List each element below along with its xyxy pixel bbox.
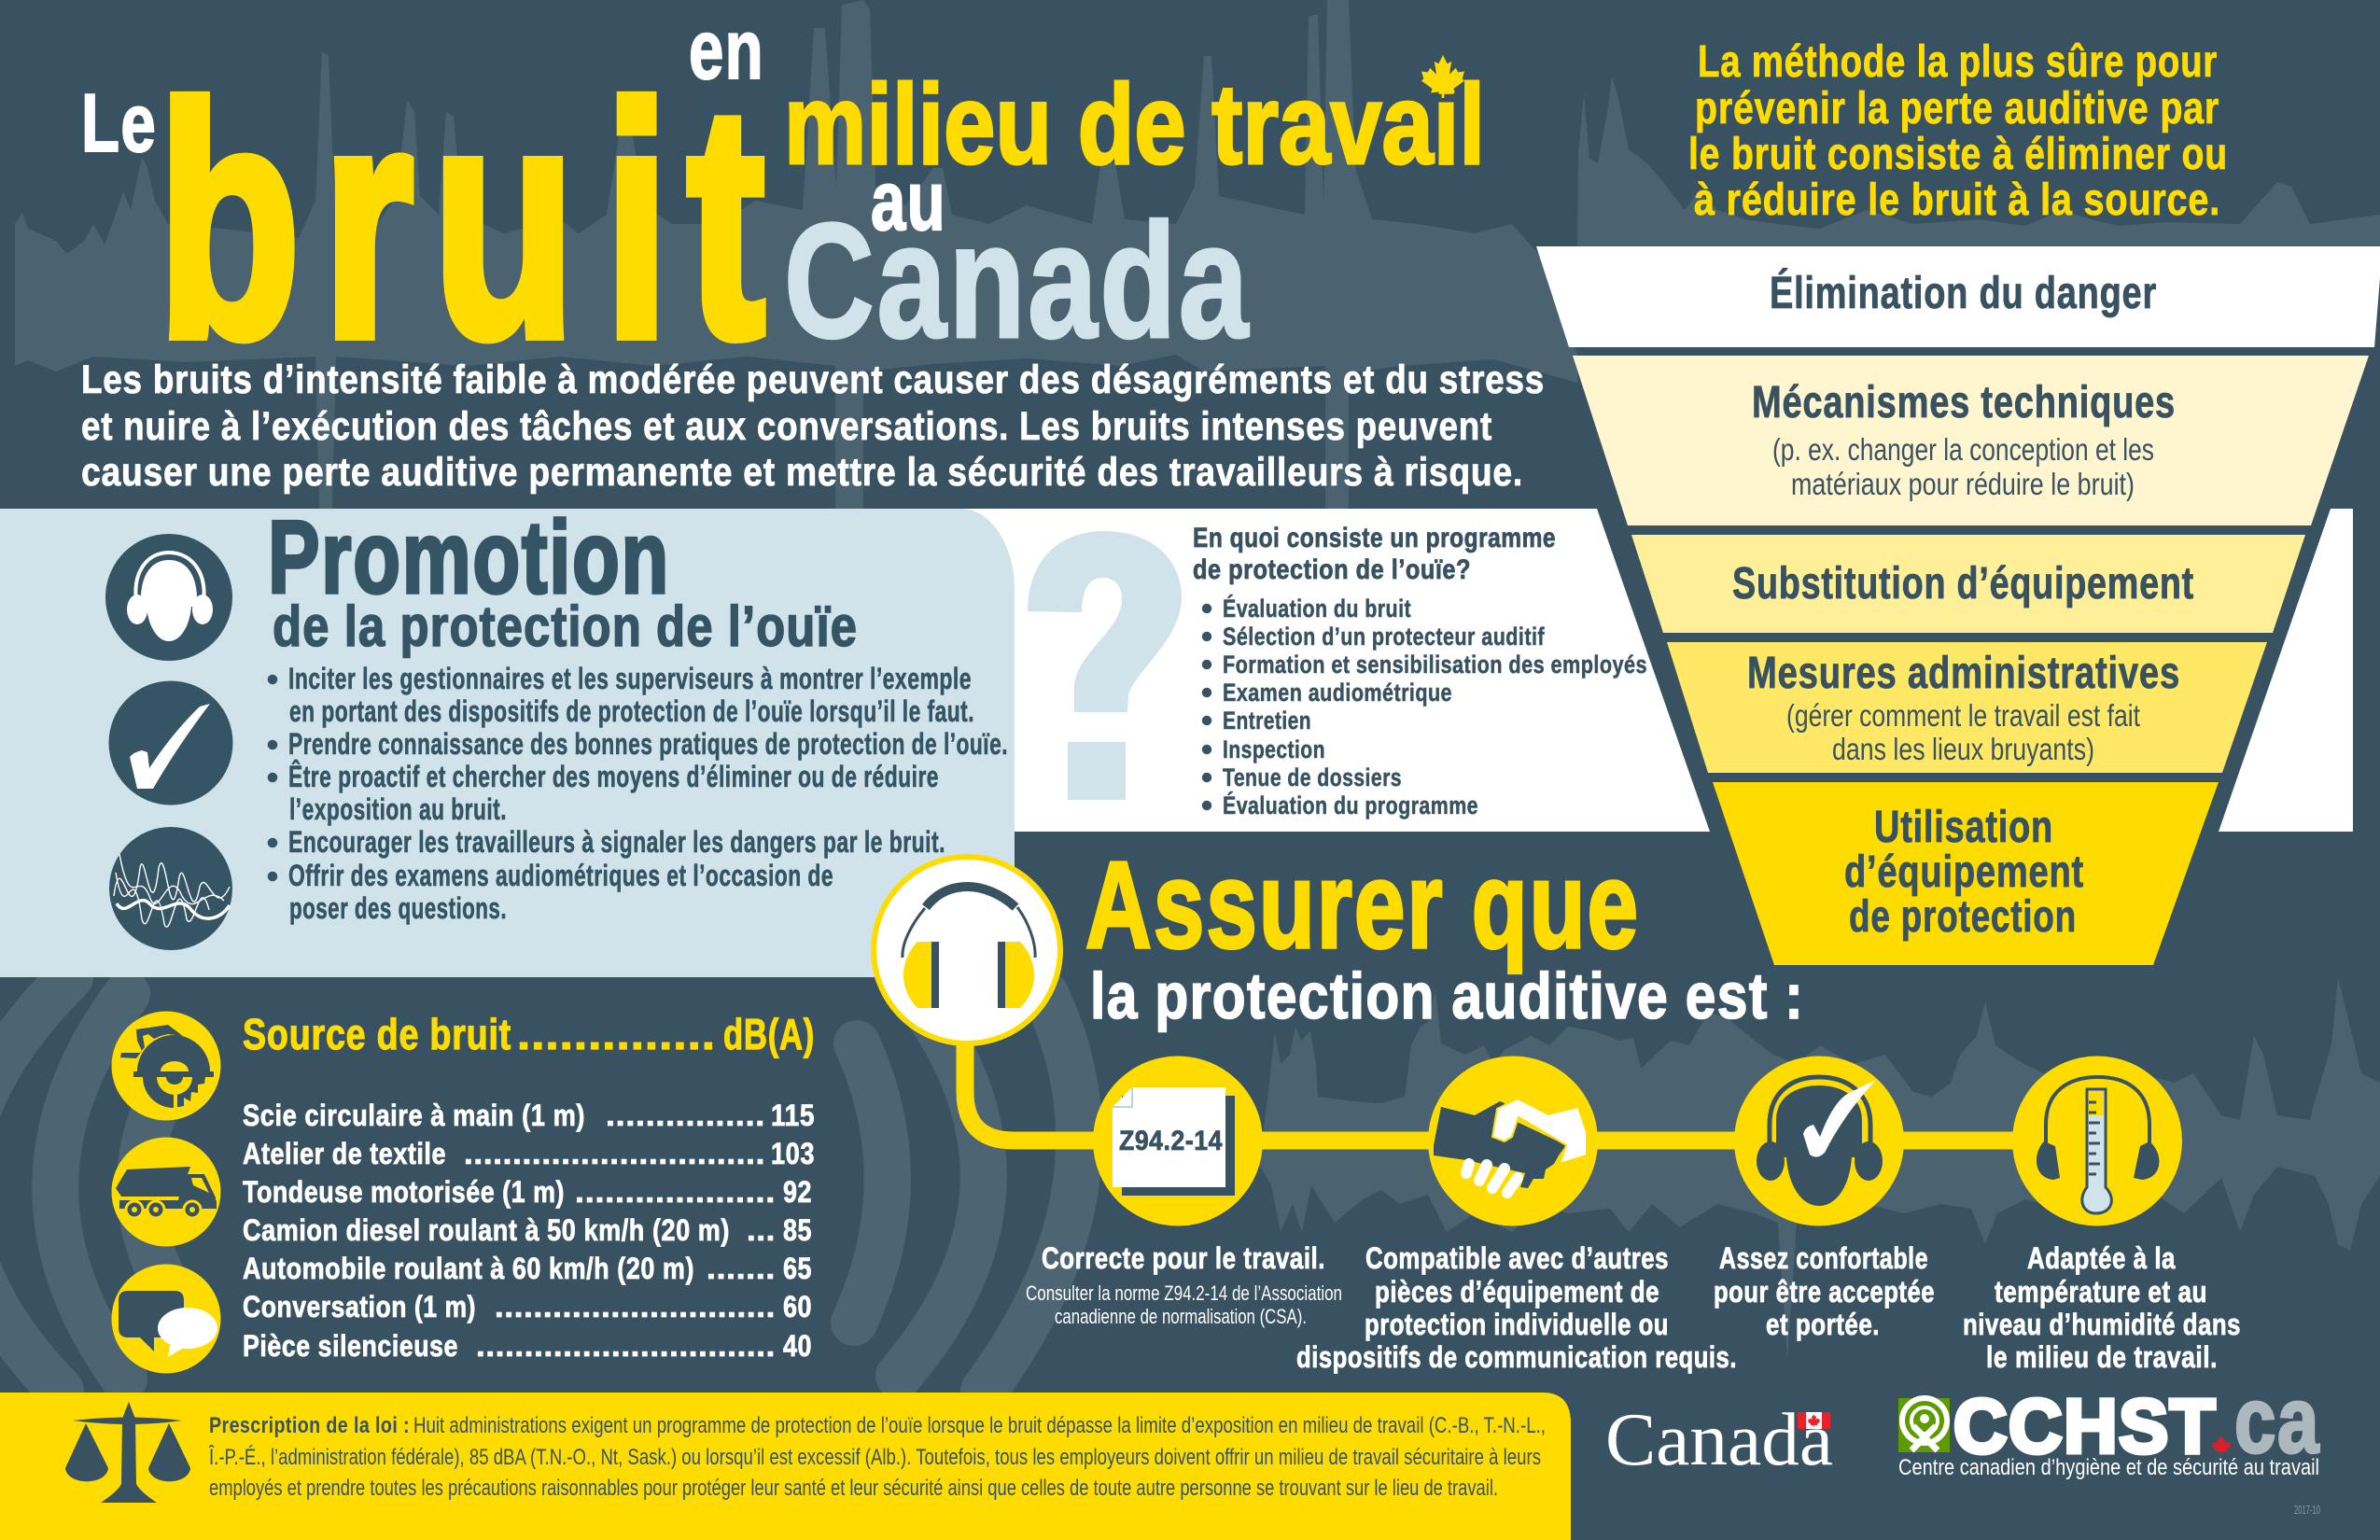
list: programme elements: Inspection — [1223, 735, 1325, 763]
table rows: 115 — [771, 1099, 815, 1132]
funnel level: substitution — [1631, 535, 2305, 633]
text block: promotion bullets — [268, 662, 1008, 925]
table rows: ............................... — [464, 1137, 765, 1170]
table rows: Automobile roulant à 60 km/h (20 m) — [243, 1252, 694, 1285]
title word: au: au — [871, 155, 946, 248]
icon: dump truck — [112, 1137, 220, 1247]
item: comfortable: pour être acceptée — [1714, 1275, 1935, 1309]
table rows: Tondeuse motorisée (1 m) — [243, 1175, 565, 1209]
background noise waveform: bottom right — [1251, 977, 2380, 1358]
table rows: ... — [747, 1213, 776, 1247]
text block: law prescription: employés et prendre toutes les précautions raisonnables pour protéger leur santé et leur sécurité ainsi que celles de toute autre personne se trouvant sur le lieu de travail. — [209, 1476, 1498, 1501]
text block: promotion bullets: en portant des dispositifs de protection de l’ouïe lorsqu’il le faut. — [289, 694, 974, 728]
callout: safest method: La méthode la plus sûre pour — [1698, 37, 2218, 87]
funnel level: elimination — [1536, 246, 2380, 347]
item: suited to temperature and humidity: Adaptée à la — [2027, 1241, 2176, 1275]
callout: safest method — [1688, 37, 2228, 225]
table header: Source de bruit — [243, 1010, 511, 1058]
list: programme elements: Entretien — [1223, 707, 1311, 735]
funnel level: administrative: Mesures administratives — [1747, 649, 2180, 698]
background sound-wave arcs — [0, 971, 1079, 1391]
item: correct for the job — [1026, 1057, 1342, 1328]
funnel level: PPE — [1713, 782, 2219, 965]
table rows: Atelier de textile — [243, 1137, 446, 1170]
table rows: 92 — [783, 1175, 812, 1209]
text block: promotion bullets: poser des questions. — [289, 891, 507, 925]
icon: speech bubbles — [112, 1264, 220, 1374]
connector line — [965, 1036, 2100, 1141]
white background panel left of funnel — [933, 509, 1710, 832]
intro paragraph: et nuire à l’exécution des tâches et aux conversations. Les bruits intenses peuvent — [81, 404, 1492, 449]
item: correct for the job: Correcte pour le travail. — [1042, 1241, 1325, 1275]
table rows — [243, 1099, 815, 1363]
table rows: ............................... — [476, 1329, 776, 1363]
background noise waveform: top — [15, 0, 2380, 509]
item: suited to temperature and humidity — [1963, 1057, 2241, 1374]
table rows: 103 — [771, 1137, 815, 1170]
heading: programme: En quoi consiste un programme — [1193, 523, 1556, 553]
logo: Canada wordmark: Canada — [1605, 1399, 1833, 1481]
table rows: ....... — [707, 1252, 776, 1285]
list: programme elements: Évaluation du programme — [1223, 791, 1478, 819]
funnel level: administrative: dans les lieux bruyants) — [1832, 732, 2094, 766]
table rows: 65 — [783, 1252, 812, 1285]
text block: promotion bullets: Inciter les gestionnaires et les superviseurs à montrer l’exemple — [288, 662, 972, 695]
icon: scales of justice — [65, 1402, 190, 1503]
heading: de la protection de l'ouïe: de la protection de l’ouïe — [273, 595, 858, 658]
list: programme elements: Tenue de dossiers — [1223, 763, 1402, 791]
title word: en: en — [689, 4, 764, 97]
wordmark: CCHST: CCHST — [1953, 1384, 2217, 1469]
title words: milieu de travail: milieu de travail — [784, 61, 1485, 188]
table rows: .................... — [575, 1175, 776, 1209]
intro paragraph — [81, 357, 1545, 495]
table header: .............. — [517, 1010, 716, 1058]
heading: programme — [1193, 523, 1556, 585]
icon: maple leaf on title — [1421, 55, 1464, 98]
item: correct for the job: Consulter la norme Z94.2-14 de l’Association — [1026, 1281, 1342, 1305]
panel: legislation — [0, 1393, 1571, 1540]
item: suited to temperature and humidity: le milieu de travail. — [1986, 1340, 2218, 1374]
funnel level: engineering: Mécanismes techniques — [1752, 378, 2176, 427]
table rows: Conversation (1 m) — [243, 1290, 476, 1323]
icon: CCHST emblem — [1898, 1398, 1950, 1452]
title word: bruit: bruit — [158, 38, 769, 405]
intro paragraph: causer une perte auditive permanente et mettre la sécurité des travailleurs à risque. — [81, 450, 1523, 495]
list: programme elements: Examen audiométrique — [1223, 679, 1452, 707]
icon: large hearing protectors — [874, 857, 1060, 1043]
panel: noise source table — [112, 1010, 815, 1374]
heading: Promotion: Promotion — [268, 500, 670, 615]
text block: promotion bullets: Offrir des examens audiométriques et l’occasion de — [288, 859, 833, 892]
panel: promotion of hearing protection — [0, 500, 1015, 977]
text block: promotion bullets: Prendre connaissance des bonnes pratiques de protection de l’ouïe. — [288, 727, 1008, 761]
funnel level: administrative — [1667, 642, 2267, 773]
icon: circular saw — [112, 1012, 220, 1120]
white background panel right of funnel — [2219, 509, 2353, 832]
item: comfortable: et portée. — [1766, 1308, 1880, 1341]
table rows: Pièce silencieuse — [243, 1329, 458, 1363]
item: compatible: Compatible avec d’autres — [1365, 1241, 1669, 1275]
table rows: 60 — [783, 1290, 812, 1323]
text block: promotion bullets: Être proactif et chercher des moyens d’éliminer ou de réduire — [288, 760, 939, 793]
intro paragraph: Les bruits d’intensité faible à modérée peuvent causer des désagréments et du stress — [81, 357, 1545, 402]
icon: red maple leaf — [2212, 1435, 2231, 1454]
item: suited to temperature and humidity: température et au — [1995, 1275, 2207, 1309]
heading: programme: de protection de l’ouïe? — [1193, 554, 1471, 585]
funnel level: elimination: Élimination du danger — [1770, 268, 2157, 318]
table rows: 85 — [783, 1213, 812, 1247]
item: compatible: protection individuelle ou — [1365, 1308, 1669, 1341]
funnel level: PPE: d’équipement — [1844, 847, 2084, 897]
funnel level: substitution: Substitution d’équipement — [1732, 559, 2194, 609]
logo: CCHST.ca — [1898, 1368, 2320, 1480]
icon: noise waves — [109, 827, 232, 950]
funnel level: engineering: matériaux pour réduire le bruit) — [1791, 467, 2135, 501]
text block: law prescription: Huit administrations exigent un programme de protection de l’ouïe lorsque le bruit dépasse la limite d’exposition en milieu de travail (C.-B., T.-N.-L., — [413, 1413, 1546, 1438]
title — [81, 4, 1485, 405]
table rows: ............................. — [495, 1290, 776, 1323]
section: ensure hearing protection is — [874, 836, 2241, 1374]
table header: dB(A) — [723, 1010, 815, 1058]
text block: law prescription: Prescription de la loi : — [209, 1413, 410, 1438]
item: correct for the job: canadienne de normalisation (CSA). — [1055, 1305, 1307, 1328]
table rows: ................ — [606, 1099, 765, 1132]
text block: law prescription — [208, 1413, 1546, 1501]
funnel level: engineering: (p. ex. changer la conception et les — [1772, 432, 2154, 467]
item: suited to temperature and humidity: niveau d’humidité dans — [1963, 1308, 2241, 1341]
item: comfortable: Assez confortable — [1719, 1241, 1928, 1275]
table rows: Scie circulaire à main (1 m) — [243, 1099, 585, 1132]
panel: hearing conservation programme question — [1028, 523, 1647, 819]
callout: safest method: prévenir la perte auditive par — [1695, 84, 2219, 133]
table header — [243, 1010, 815, 1058]
icon: check mark — [108, 681, 233, 805]
item: correct for the job: Z94.2-14 — [1119, 1126, 1223, 1156]
icon: head with hearing protectors — [105, 534, 232, 661]
text block: promotion bullets: Encourager les travailleurs à signaler les dangers par le bruit. — [288, 825, 945, 859]
callout: safest method: le bruit consiste à éliminer ou — [1688, 130, 2228, 179]
text block: law prescription: Î.-P.-É., l’administration fédérale), 85 dBA (T.N.-O., Nt, Sask.) ou lorsqu’il est excessif (Alb.). Toutefois, tous les employeurs doivent offrir un milieu de travail sécuritaire à leurs — [208, 1445, 1541, 1470]
item: compatible — [1296, 1057, 1737, 1374]
panel: hierarchy of controls funnel — [1536, 246, 2380, 965]
list: programme elements: Sélection d’un protecteur auditif — [1223, 623, 1545, 651]
text block: promotion bullets: l’exposition au bruit. — [289, 792, 507, 826]
list: programme elements: Évaluation du bruit — [1223, 594, 1411, 623]
title word: Le: Le — [81, 77, 157, 169]
funnel level: PPE: de protection — [1849, 892, 2077, 942]
item: comfortable — [1714, 1057, 1935, 1341]
callout: safest method: à réduire le bruit à la source. — [1694, 175, 2220, 225]
item: compatible: pièces d’équipement de — [1375, 1275, 1659, 1309]
icon: question mark — [1028, 531, 1182, 800]
list: programme elements: Formation et sensibilisation des employés — [1223, 651, 1647, 679]
list: programme elements — [1202, 594, 1647, 819]
table rows: 40 — [783, 1329, 812, 1363]
funnel level: engineering — [1573, 356, 2369, 525]
date code: 2017-10 — [2294, 1503, 2320, 1517]
table rows: Camion diesel roulant à 50 km/h (20 m) — [243, 1213, 730, 1247]
funnel level: administrative: (gérer comment le travail est fait — [1786, 698, 2140, 733]
heading: Assurer que: Assurer que — [1085, 836, 1640, 973]
item: compatible: dispositifs de communication requis. — [1296, 1340, 1737, 1374]
funnel level: PPE: Utilisation — [1874, 803, 2053, 852]
wordmark: ca: ca — [2234, 1368, 2320, 1473]
subheading: la protection auditive est: la protection auditive est : — [1090, 959, 1804, 1032]
title word: Canada: Canada — [784, 190, 1251, 372]
